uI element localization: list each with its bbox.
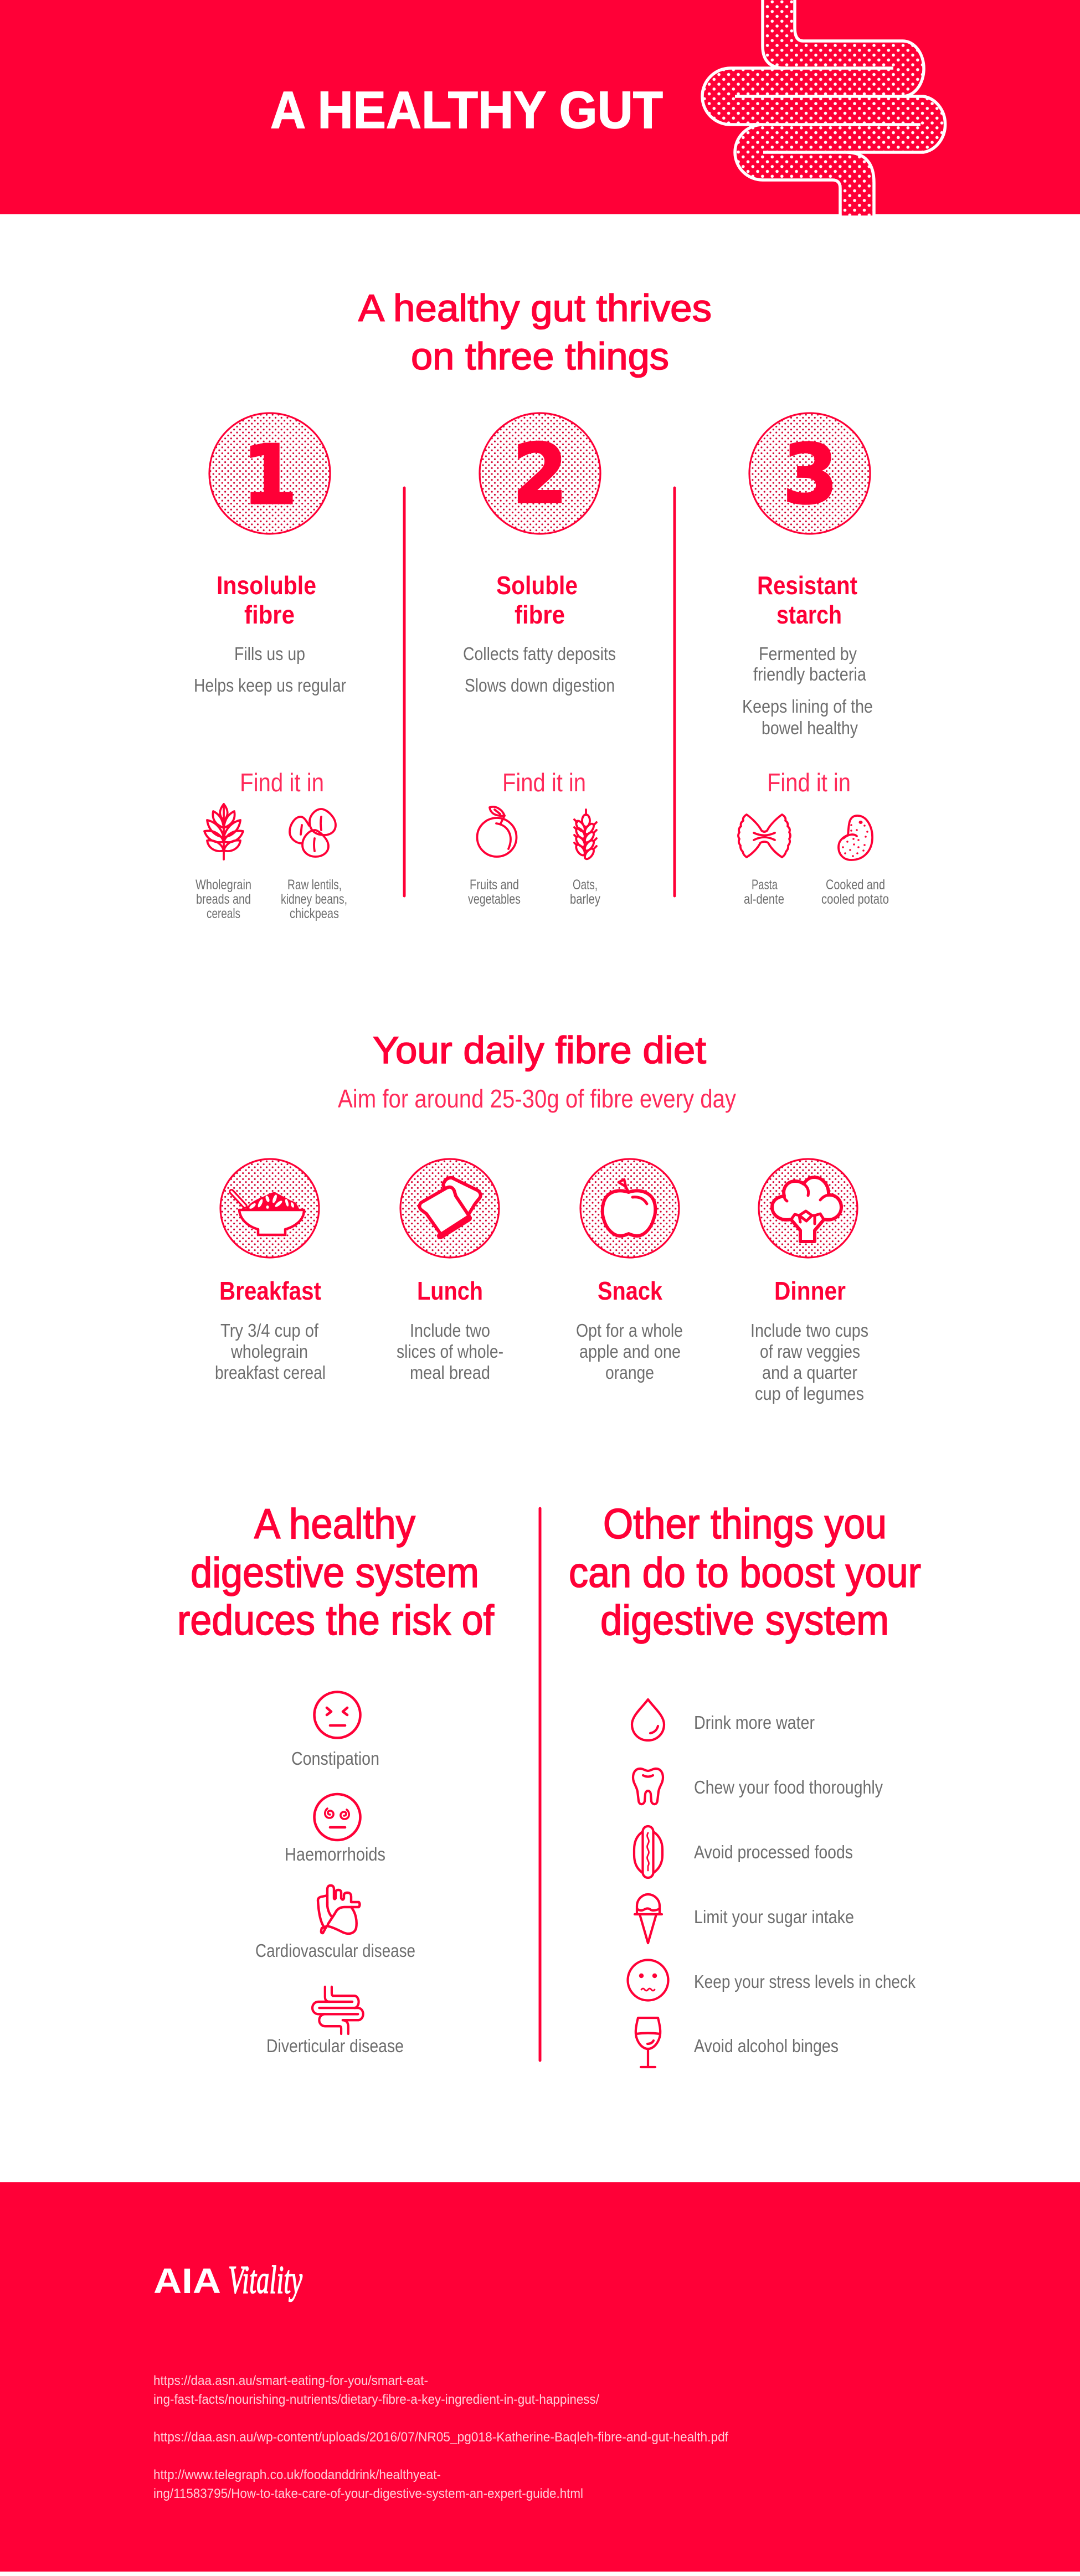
icon: water drop [632, 1699, 664, 1740]
icon: ice cream [635, 1894, 662, 1943]
food labels [468, 877, 600, 907]
food labels: cereals [207, 906, 240, 921]
meal: lunch [397, 1159, 503, 1383]
icon: wheat [204, 804, 243, 859]
column: resistant starch [738, 413, 889, 907]
food labels: Oats, [573, 877, 598, 893]
snack text [576, 1320, 683, 1383]
number badge 2: 2 [512, 426, 568, 522]
logo: AIA Vitality: Vitality [228, 2258, 302, 2302]
heading: reduces the risk: digestive system [191, 1549, 479, 1596]
text: alcohol: Avoid alcohol binges [694, 2036, 839, 2056]
snack text: orange [605, 1362, 654, 1383]
food labels: Pasta [752, 877, 778, 893]
icon: dotted intestine [702, 0, 945, 217]
icon: constipation face [315, 1692, 360, 1738]
icon: dizzy face [315, 1794, 360, 1840]
panel: footer [0, 2182, 1080, 2572]
heading: boost your digestive system: Other things you [603, 1501, 887, 1548]
food labels: Cooked and [826, 877, 885, 893]
panel: three things [194, 287, 889, 921]
label diverticular: Diverticular disease [266, 2036, 404, 2056]
number badge 2 [480, 413, 600, 534]
number badge 3: 3 [783, 427, 838, 522]
benefits text: Fermented by [759, 643, 857, 664]
label cardiovascular: Cardiovascular disease [255, 1940, 415, 1961]
icon: broccoli [759, 1159, 857, 1258]
breakfast text: Try 3/4 cup of [220, 1320, 319, 1341]
sources list: http://www.telegraph.co.uk/foodanddrink/healthyeat- [153, 2467, 441, 2482]
subheading soluble fibre [496, 571, 578, 629]
dinner text: and a quarter [762, 1362, 857, 1383]
benefits text: Slows down digestion [465, 675, 615, 695]
label lunch: Lunch [417, 1276, 483, 1305]
icon: tooth [633, 1769, 663, 1804]
subheading insoluble fibre: Insoluble [217, 571, 316, 600]
icon: oats [574, 810, 596, 861]
benefits text: bowel healthy [762, 718, 858, 738]
icon: fruit [477, 807, 516, 857]
snack text: Opt for a whole [576, 1320, 683, 1341]
icon: pasta [738, 815, 790, 857]
breakfast text: breakfast cereal [215, 1362, 326, 1383]
sources list [153, 2373, 728, 2501]
panel: daily fibre diet [215, 1029, 868, 1404]
heading: reduces the risk [177, 1501, 495, 1644]
dinner text: cup of legumes [755, 1383, 864, 1404]
sources list: https://daa.asn.au/wp-content/uploads/2016/07/NR05_pg018-Katherine-Baqleh-fibre-and-gut-health.pdf [153, 2430, 728, 2445]
icon: cereal bowl [220, 1159, 319, 1258]
benefits text: Helps keep us regular [194, 675, 346, 695]
subheading resistant starch: starch [776, 600, 842, 629]
subheading resistant starch [757, 571, 857, 629]
icon: intestine [312, 1987, 363, 2034]
subheading insoluble fibre [217, 571, 316, 629]
subheading soluble fibre: Soluble [496, 571, 578, 600]
icon: stressed face [628, 1960, 668, 2000]
heading: reduces the risk: A healthy [254, 1501, 415, 1548]
panel: other things you can do [569, 1501, 921, 2067]
text: sugar: Limit your sugar intake [694, 1907, 854, 1927]
divider left [403, 488, 405, 896]
icon: potato [839, 816, 872, 860]
heading: boost your digestive system: digestive system [600, 1597, 889, 1644]
dinner text: of raw veggies [760, 1341, 860, 1362]
food labels: barley [570, 892, 600, 907]
subheading resistant starch: Resistant [757, 571, 857, 600]
subheading soluble fibre: fibre [515, 600, 565, 629]
text: water: Drink more water [694, 1712, 815, 1733]
dinner text [750, 1320, 868, 1404]
food labels: al-dente [744, 892, 784, 907]
icon: lentils [290, 809, 336, 857]
text: stress: Keep your stress levels in check [694, 1971, 916, 1992]
meal: dinner [750, 1159, 868, 1404]
icon: heart [318, 1885, 360, 1934]
sources list: ing-fast-facts/nourishing-nutrients/dietary-fibre-a-key-ingredient-in-gut-happiness/ [153, 2392, 599, 2407]
heading: your daily fibre diet: Your daily fibre diet [373, 1029, 706, 1071]
snack text: apple and one [579, 1341, 681, 1362]
text: chew: Chew your food thoroughly [694, 1777, 883, 1797]
benefits text: Keeps lining of the [742, 696, 873, 717]
find it in: Find it in [240, 768, 324, 797]
icon: wine glass [636, 2018, 660, 2067]
benefits text: Collects fatty deposits [463, 643, 616, 664]
food labels: cooled potato [821, 892, 889, 907]
sources list: ing/11583795/How-to-take-care-of-your-digestive-system-an-expert-guide.html [153, 2486, 583, 2501]
column: soluble fibre [463, 413, 616, 907]
lunch text: meal bread [410, 1362, 490, 1383]
subheading: fibre target: Aim for around 25-30g of fibre every day [338, 1084, 736, 1113]
food labels: kidney beans, [281, 892, 347, 907]
heading: boost your digestive system [569, 1501, 921, 1644]
benefits text [463, 643, 616, 695]
benefits text: Fills us up [234, 643, 305, 664]
label dinner: Dinner [774, 1276, 846, 1305]
panel: reduces the risk of [177, 1501, 495, 2056]
divider centre [538, 1508, 542, 2060]
food labels: Wholegrain [196, 877, 251, 893]
breakfast text: wholegrain [230, 1341, 308, 1362]
food labels [196, 877, 347, 921]
divider right [673, 488, 676, 896]
heading: a healthy gut thrives [358, 287, 712, 378]
number badge 3 [749, 413, 870, 534]
logo: AIA Vitality [153, 2258, 302, 2302]
lunch text: slices of whole- [397, 1341, 503, 1362]
food labels: chickpeas [290, 906, 339, 921]
food labels: vegetables [468, 892, 521, 907]
subheading insoluble fibre: fibre [244, 600, 295, 629]
label snack: Snack [598, 1276, 662, 1305]
food labels: Fruits and [470, 877, 519, 893]
lunch text: Include two [410, 1320, 490, 1341]
breakfast text [215, 1320, 326, 1383]
text: processed foods: Avoid processed foods [694, 1842, 853, 1862]
benefits text [742, 643, 873, 738]
benefits text: friendly bacteria [753, 664, 867, 684]
sources list: https://daa.asn.au/smart-eating-for-you/smart-eat- [153, 2373, 428, 2388]
label constipation: Constipation [291, 1748, 379, 1769]
logo: AIA Vitality: AIA [153, 2261, 221, 2301]
panel: header banner [0, 0, 1080, 217]
number badge 1 [209, 413, 330, 534]
heading: a healthy gut thrives: on three things [411, 335, 669, 378]
find it in: Find it in [502, 768, 586, 797]
icon: bread slices [400, 1159, 499, 1258]
food labels [744, 877, 889, 907]
meal: breakfast [215, 1159, 326, 1383]
title: A HEALTHY GUT [270, 81, 663, 140]
heading: a healthy gut thrives: A healthy gut thrives [358, 287, 712, 329]
label breakfast: Breakfast [219, 1276, 321, 1305]
dinner text: Include two cups [750, 1320, 868, 1341]
lunch text [397, 1320, 503, 1383]
food labels: Raw lentils, [287, 877, 342, 893]
food labels: breads and [196, 892, 251, 907]
benefits text [194, 643, 346, 695]
label haemorrhoids: Haemorrhoids [285, 1844, 385, 1864]
number badge 1: 1 [242, 427, 297, 523]
column: insoluble fibre [194, 413, 347, 921]
meal: snack [576, 1159, 683, 1383]
heading: reduces the risk: reduces the risk of [177, 1597, 495, 1644]
icon: apple [580, 1159, 679, 1258]
icon: hot dog [634, 1826, 662, 1878]
find it in: Find it in [767, 768, 851, 797]
heading: boost your digestive system: can do to boost your [569, 1549, 921, 1596]
